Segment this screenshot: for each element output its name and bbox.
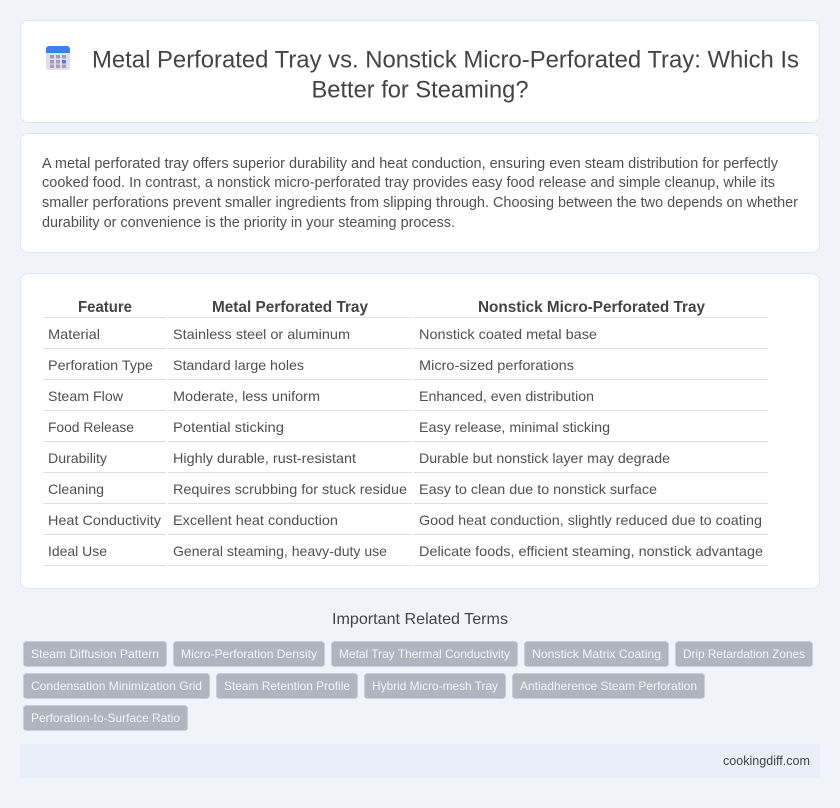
tag: Steam Diffusion Pattern	[31, 647, 159, 661]
tag: Condensation Minimization Grid	[31, 679, 202, 693]
row: cleaning	[48, 481, 657, 497]
intro paragraph: smaller perforations prevent smaller ingredients from slipping through. Choosing between the two depends on whether	[42, 195, 798, 211]
panel: introduction	[20, 134, 820, 252]
panel: header	[20, 20, 820, 122]
footer: cookingdiff.com	[723, 753, 810, 768]
related term tags	[24, 642, 812, 730]
tag	[24, 706, 188, 730]
tag	[174, 642, 324, 666]
title: Metal Perforated Tray vs. Nonstick Micro-Perforated Tray: Which Is	[92, 46, 799, 74]
tag: Nonstick Matrix Coating	[532, 647, 661, 661]
row: food release: Food Release	[48, 419, 134, 435]
row: material: Stainless steel or aluminum	[173, 326, 350, 342]
tag: Micro-Perforation Density	[181, 647, 317, 661]
intro paragraph: A metal perforated tray offers superior durability and heat conduction, ensuring even steam distribution for perfectly	[42, 156, 779, 172]
row: cleaning: Cleaning	[48, 481, 104, 497]
table header row: Metal Perforated Tray	[212, 299, 368, 316]
table header row	[78, 299, 705, 316]
row: ideal use: Ideal Use	[48, 543, 107, 559]
row: steam flow: Enhanced, even distribution	[419, 388, 594, 404]
tag: Steam Retention Profile	[224, 679, 350, 693]
tag	[364, 674, 506, 698]
tag	[676, 642, 812, 666]
tag: Perforation-to-Surface Ratio	[31, 711, 180, 725]
row: durability: Durable but nonstick layer may degrade	[419, 450, 670, 466]
row: heat conductivity	[48, 512, 762, 528]
row: steam flow: Steam Flow	[48, 388, 124, 404]
table header row: Feature	[78, 299, 132, 316]
title	[92, 46, 799, 104]
row: heat conductivity: Excellent heat conduction	[173, 512, 338, 528]
row: material	[48, 326, 597, 342]
icon: calendar grid	[46, 46, 70, 70]
intro paragraph	[42, 156, 798, 231]
tag: Antiadherence Steam Perforation	[520, 679, 697, 693]
row: ideal use: General steaming, heavy-duty use	[173, 543, 387, 559]
table header row: Nonstick Micro-Perforated Tray	[478, 299, 705, 316]
row: ideal use	[48, 543, 763, 559]
row: durability: Highly durable, rust-resistant	[173, 450, 356, 466]
tag	[24, 674, 210, 698]
tag	[332, 642, 518, 666]
intro paragraph: durability or convenience is the priority in your steaming process.	[42, 215, 455, 231]
tag: Drip Retardation Zones	[683, 647, 805, 661]
tag	[524, 642, 668, 666]
title: Better for Steaming?	[312, 76, 528, 104]
row: perforation type: Micro-sized perforations	[419, 357, 574, 373]
panel: comparison table	[20, 274, 820, 588]
row: cleaning: Requires scrubbing for stuck residue	[173, 481, 407, 497]
row: steam flow: Moderate, less uniform	[173, 388, 320, 404]
tag	[216, 674, 358, 698]
heading: important related terms: Important Related Terms	[332, 611, 508, 628]
row: heat conductivity: Good heat conduction, slightly reduced due to coating	[419, 512, 762, 528]
row: food release: Potential sticking	[173, 419, 284, 435]
row: food release	[48, 419, 610, 435]
row: material: Nonstick coated metal base	[419, 326, 597, 342]
row: cleaning: Easy to clean due to nonstick surface	[419, 481, 657, 497]
row: ideal use: Delicate foods, efficient steaming, nonstick advantage	[419, 543, 763, 559]
row: heat conductivity: Heat Conductivity	[48, 512, 161, 528]
row: steam flow	[48, 388, 594, 404]
row: durability: Durability	[48, 450, 107, 466]
tag	[512, 674, 704, 698]
row: food release: Easy release, minimal sticking	[419, 419, 610, 435]
tag: Hybrid Micro-mesh Tray	[372, 679, 498, 693]
row: perforation type	[48, 357, 574, 373]
intro paragraph: cooked food. In contrast, a nonstick micro-perforated tray provides easy food release and simple cleanup, while its	[42, 175, 775, 191]
tag	[24, 642, 166, 666]
footer	[20, 744, 820, 778]
row: material: Material	[48, 326, 100, 342]
row: perforation type: Perforation Type	[48, 357, 153, 373]
row: durability	[48, 450, 670, 466]
row: perforation type: Standard large holes	[173, 357, 304, 373]
tag: Metal Tray Thermal Conductivity	[339, 647, 510, 661]
